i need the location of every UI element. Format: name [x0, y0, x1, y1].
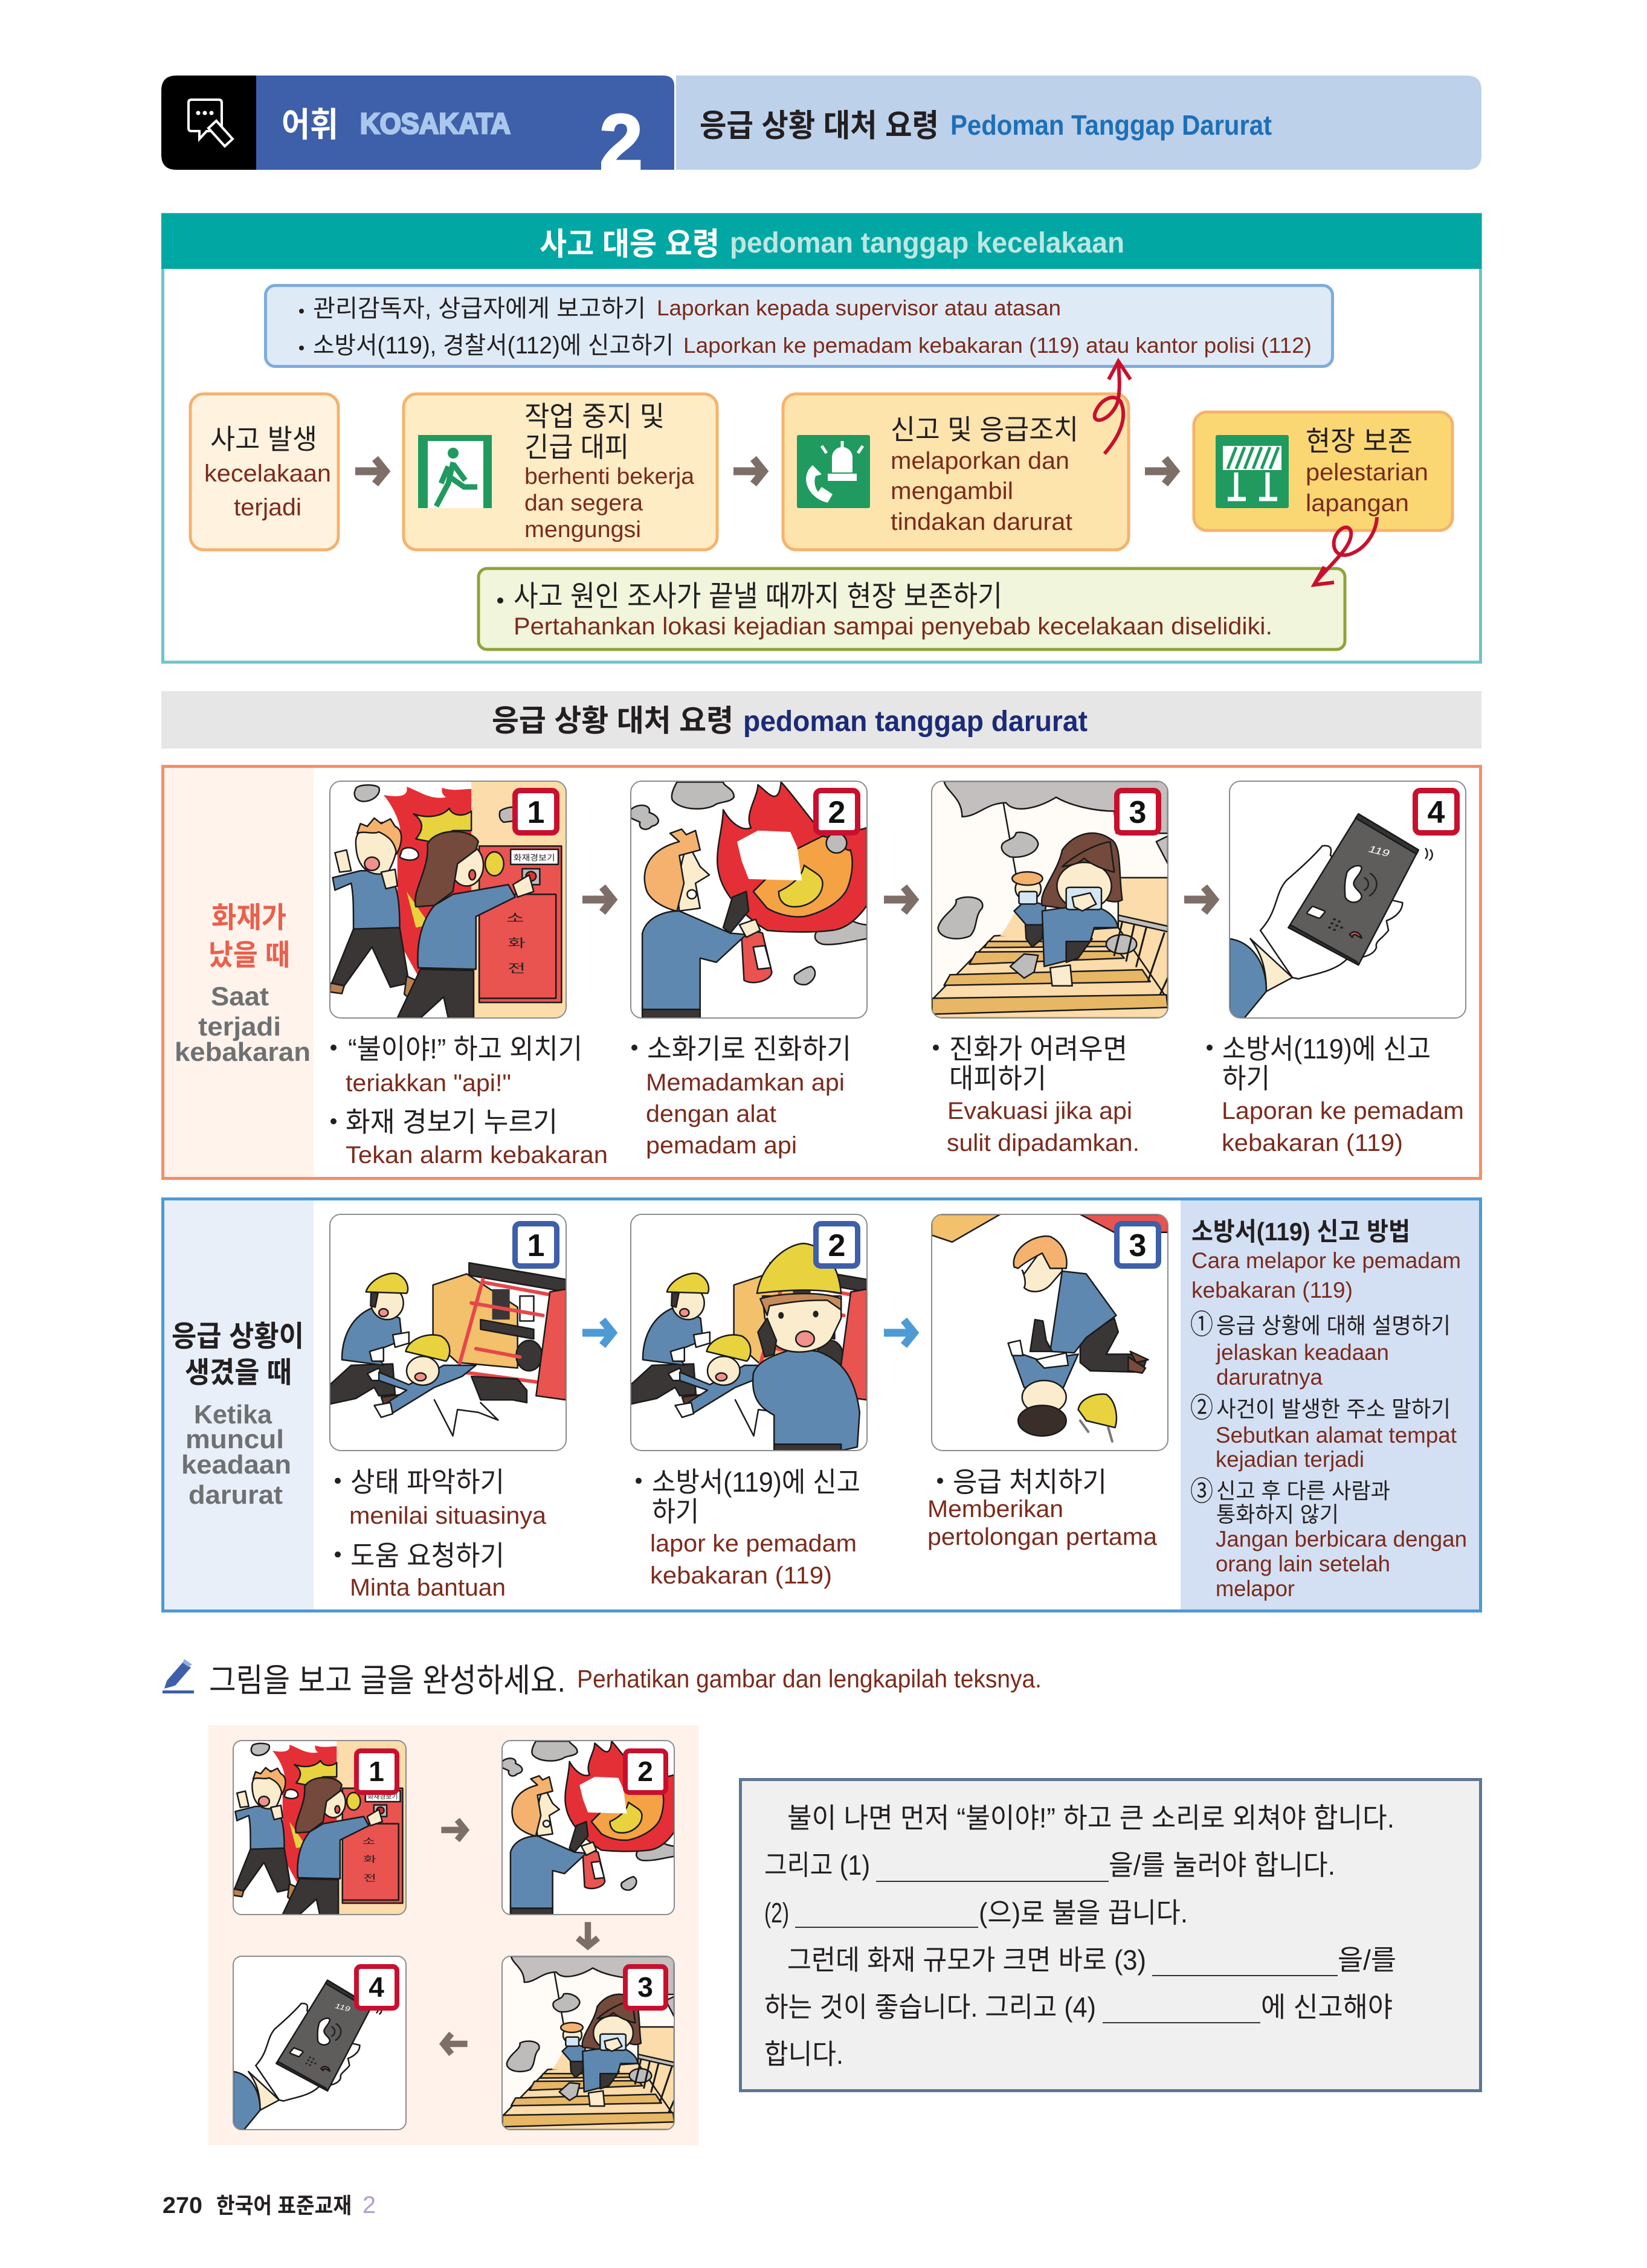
- side panel: how to report to 119: ③: [1190, 1475, 1213, 1507]
- side label: emergency: keadaan: [181, 1450, 291, 1480]
- step 4 text: 하기: [1222, 1063, 1270, 1094]
- step 3 text: 응급 처치하기: [953, 1466, 1107, 1498]
- step 2 text: Memadamkan api: [646, 1069, 845, 1096]
- exercise instruction: 그림을 보고 글을 완성하세요.: [209, 1663, 566, 1699]
- callout: report to supervisor and 119/112: [266, 285, 1333, 366]
- step 2 frame and number: [631, 781, 867, 1018]
- step 4 text: kebakaran (119): [1222, 1130, 1403, 1156]
- step 2 frame and number: [631, 1214, 867, 1451]
- side panel: how to report to 119: ②: [1190, 1392, 1213, 1423]
- step 2 illustration: call 119: [631, 1242, 866, 1450]
- flow step: accident occurs: 사고 발생: [210, 424, 317, 455]
- step 3 frame and number: [932, 1214, 1168, 1451]
- arrow: [884, 887, 914, 912]
- panel: when a fire breaks out: [163, 766, 1480, 1178]
- flow step: preserve the site: [1194, 412, 1452, 530]
- step 1 text: 상태 파악하기: [350, 1466, 504, 1498]
- arrow: [1184, 887, 1214, 912]
- step 3 illustration: evacuate by stairs: [932, 781, 1168, 1018]
- picture 4: 4: [369, 1971, 384, 2003]
- picture 3: [502, 1956, 674, 2130]
- step 1 text: Tekan alarm kebakaran: [346, 1142, 608, 1168]
- page header banner: [161, 76, 1481, 187]
- arrow: [355, 459, 385, 484]
- step 4 text: 소방서(119)에 신고: [1222, 1033, 1431, 1065]
- panel heading: [161, 213, 1481, 269]
- flow step: stop work and evacuate: 작업 중지 및: [524, 401, 665, 432]
- flow step: report and emergency measures: tindakan darurat: [891, 509, 1072, 535]
- title tab: emergency response guide: Pedoman Tanggap Darurat: [950, 109, 1272, 141]
- flow step: stop work and evacuate: [404, 394, 717, 550]
- hand-drawn red arrow down: [1314, 517, 1377, 585]
- flow step: preserve the site: 현장 보존: [1306, 425, 1413, 457]
- side label: fire: terjadi: [198, 1012, 281, 1042]
- icon: pencil: [163, 1659, 194, 1693]
- step 2 frame and number: 2: [828, 1228, 845, 1263]
- step 4 frame and number: 4: [1428, 795, 1445, 830]
- unit tab: vocabulary number 2: KOSAKATA: [360, 108, 511, 140]
- panel: fill-in-the-blank text: 그런데 화재 규모가 크면 바로 (3): [787, 1944, 1146, 1976]
- step 2 text: 소화기로 진화하기: [647, 1033, 851, 1065]
- panel: fill-in-the-blank text: 에 신고해야: [1261, 1991, 1393, 2023]
- step 4 text: [1207, 1033, 1464, 1156]
- step 3 frame and number: [932, 781, 1168, 1018]
- picture 1: 1: [369, 1756, 384, 1787]
- panel: fill-in-the-blank text: [741, 1780, 1480, 2090]
- flow step: stop work and evacuate: 긴급 대피: [524, 431, 629, 463]
- side label: fire: kebakaran: [175, 1037, 311, 1067]
- panel: when an emergency occurs: [163, 1199, 1480, 1611]
- callout: report to supervisor and 119/112: 소방서(119), 경찰서(112)에 신고하기: [313, 332, 674, 359]
- panel: fill-in-the-blank text: 을/를: [1338, 1944, 1396, 1976]
- arrow: [1145, 459, 1175, 484]
- step 3 text: 진화가 어려우면: [949, 1033, 1127, 1065]
- side label: emergency: Ketika: [194, 1400, 272, 1429]
- step 1 text: teriakkan "api!": [346, 1070, 511, 1097]
- step 4 illustration: call 119: [1230, 813, 1433, 1017]
- side panel: how to report to 119: Jangan berbicara dengan: [1216, 1527, 1467, 1551]
- unit tab: vocabulary number 2: 2: [599, 98, 643, 187]
- icon: emergency exit: [418, 435, 492, 508]
- side label: emergency: 응급 상황이: [172, 1321, 304, 1353]
- step 2 text: [636, 1466, 860, 1589]
- callout: preserve the site until investigation ends: 사고 원인 조사가 끝낼 때까지 현장 보존하기: [514, 581, 1002, 613]
- step 2 text: kebakaran (119): [650, 1562, 832, 1589]
- picture 3: 3: [637, 1971, 653, 2003]
- unit tab: vocabulary number 2: [256, 76, 674, 187]
- step 2 text: dengan alat: [646, 1101, 776, 1127]
- icon: chat bubble with pencil: [161, 76, 257, 170]
- arrow: [582, 1320, 613, 1345]
- step 3 text: [927, 1466, 1158, 1550]
- step 4 frame and number: [1230, 781, 1466, 1018]
- step 1 frame and number: 1: [527, 1228, 544, 1263]
- side panel: how to report to 119: kejadian terjadi: [1216, 1447, 1364, 1472]
- arrow: [884, 1320, 914, 1345]
- callout: preserve the site until investigation ends: [479, 569, 1345, 649]
- step 2 frame and number: 2: [828, 795, 845, 830]
- side label: fire: Saat: [211, 982, 269, 1011]
- side label: emergency: [164, 1200, 314, 1609]
- section heading: emergency response guide: [161, 691, 1481, 749]
- side panel: how to report to 119: orang lain setelah: [1216, 1551, 1390, 1576]
- picture 2: 2: [637, 1756, 653, 1787]
- step 2 text: [631, 1033, 851, 1159]
- side label: emergency: darurat: [189, 1480, 283, 1510]
- step 3 text: sulit dipadamkan.: [947, 1130, 1139, 1156]
- panel heading: pedoman tanggap kecelakaan: [730, 227, 1124, 259]
- step 1 illustration: shout and press alarm: [330, 781, 566, 1018]
- side label: fire: 화재가: [211, 902, 286, 934]
- exercise instruction: [163, 1659, 1042, 1699]
- flow step: report and emergency measures: [783, 394, 1129, 550]
- step 1 text: “불이야!” 하고 외치기: [348, 1033, 582, 1065]
- side panel: how to report to 119: Cara melapor ke pemadam: [1191, 1248, 1461, 1273]
- flow step: report and emergency measures: 신고 및 응급조치: [891, 414, 1078, 445]
- side panel: how to report to 119: jelaskan keadaan: [1216, 1340, 1389, 1365]
- step 3 text: Evakuasi jika api: [947, 1098, 1132, 1124]
- step 3 text: [933, 1033, 1139, 1156]
- side panel: how to report to 119: kebakaran (119): [1191, 1278, 1353, 1303]
- step 1 text: [330, 1033, 608, 1168]
- side panel: how to report to 119: 신고 후 다른 사람과: [1216, 1478, 1390, 1503]
- flow step: accident occurs: kecelakaan: [204, 460, 331, 487]
- step 1 illustration: assess the situation: [330, 1262, 566, 1437]
- icon: siren and phone: [797, 435, 870, 508]
- panel: fill-in-the-blank text: 합니다.: [764, 2038, 843, 2070]
- icon: barrier: [1216, 435, 1289, 508]
- flow step: stop work and evacuate: dan segera: [524, 491, 643, 516]
- exercise instruction: Perhatikan gambar dan lengkapilah teksnya.: [577, 1664, 1042, 1693]
- side panel: how to report to 119: Sebutkan alamat tempat: [1216, 1423, 1457, 1448]
- arrow down: [578, 1922, 598, 1946]
- side label: emergency: muncul: [185, 1425, 284, 1454]
- side label: emergency: 생겼을 때: [185, 1357, 292, 1389]
- flow step: accident occurs: terjadi: [234, 494, 301, 521]
- section heading: emergency response guide: 응급 상황 대처 요령: [492, 704, 733, 738]
- step 2 illustration: use extinguisher: [631, 781, 867, 1018]
- side panel: how to report to 119: 사건이 발생한 주소 말하기: [1216, 1397, 1451, 1422]
- flow step: preserve the site: lapangan: [1306, 490, 1409, 517]
- footer: page number and book title: [163, 2192, 376, 2218]
- panel: fill-in-the-blank text: 그리고 (1): [764, 1849, 870, 1881]
- arrow: [582, 887, 613, 912]
- panel: fill-in-the-blank text: 불이 나면 먼저 “불이야!” 하고 큰 소리로 외쳐야 합니다.: [787, 1802, 1394, 1834]
- panel: fill-in-the-blank text: 을/를 눌러야 합니다.: [1109, 1849, 1335, 1881]
- step 4 text: Laporan ke pemadam: [1222, 1098, 1464, 1124]
- panel heading: 사고 대응 요령: [540, 227, 720, 262]
- arrow right: [441, 1820, 465, 1840]
- panel: fill-in-the-blank text: (2): [764, 1897, 789, 1928]
- footer: page number and book title: 한국어 표준교재: [216, 2193, 352, 2218]
- step 2 text: pemadam api: [646, 1132, 797, 1159]
- step 1 text: [335, 1466, 547, 1601]
- picture 2: [502, 1741, 674, 1915]
- step 1 text: menilai situasinya: [349, 1503, 547, 1529]
- step 2 text: 소방서(119)에 신고: [652, 1466, 860, 1498]
- flow step: preserve the site: pelestarian: [1306, 459, 1428, 486]
- panel: exercise picture sequence: [208, 1725, 698, 2145]
- title tab: emergency response guide: [676, 76, 1481, 170]
- step 2 text: lapor ke pemadam: [650, 1530, 857, 1557]
- step 3 text: Memberikan: [927, 1496, 1063, 1522]
- step 3 text: 대피하기: [949, 1063, 1046, 1094]
- step 1 text: 도움 요청하기: [350, 1540, 504, 1571]
- callout: report to supervisor and 119/112: Laporkan kepada supervisor atau atasan: [657, 295, 1061, 320]
- step 3 frame and number: 3: [1129, 1228, 1146, 1263]
- arrow: [733, 459, 764, 484]
- side panel: how to report to 119: 응급 상황에 대해 설명하기: [1216, 1313, 1451, 1338]
- unit tab: vocabulary number 2: 어휘: [282, 106, 338, 144]
- panel: fill-in-the-blank text: 하는 것이 좋습니다. 그리고 (4): [764, 1991, 1096, 2023]
- panel: fill-in-the-blank text: (으)로 불을 끕니다.: [979, 1897, 1188, 1928]
- side panel: how to report to 119: [1181, 1200, 1479, 1609]
- step 3 frame and number: 3: [1129, 795, 1146, 830]
- step 1 text: Minta bantuan: [350, 1574, 506, 1601]
- side panel: how to report to 119: ①: [1190, 1309, 1213, 1340]
- panel: accident response guide: [161, 213, 1481, 662]
- step 1 text: 화재 경보기 누르기: [346, 1106, 558, 1138]
- side panel: how to report to 119: daruratnya: [1216, 1365, 1323, 1390]
- step 1 frame and number: [330, 1214, 566, 1451]
- side label: fire: 났을 때: [208, 939, 290, 971]
- section heading: emergency response guide: pedoman tanggap darurat: [743, 706, 1088, 738]
- callout: report to supervisor and 119/112: 관리감독자, 상급자에게 보고하기: [313, 295, 646, 322]
- step 1 frame and number: 1: [527, 795, 544, 830]
- callout: preserve the site until investigation ends: Pertahankan lokasi kejadian sampai penyebab kecelakaan diselidiki.: [514, 613, 1272, 640]
- side panel: how to report to 119: 소방서(119) 신고 방법: [1191, 1217, 1410, 1246]
- step 3 text: pertolongan pertama: [927, 1524, 1158, 1550]
- side panel: how to report to 119: melapor: [1216, 1576, 1295, 1601]
- side panel: how to report to 119: 통화하지 않기: [1216, 1502, 1339, 1527]
- side label: fire: [164, 768, 314, 1177]
- step 1 frame and number: [330, 781, 566, 1018]
- footer: page number and book title: 2: [363, 2192, 376, 2218]
- step 2 text: 하기: [652, 1496, 699, 1527]
- hand-drawn red arrow up: [1095, 361, 1130, 454]
- flow step: report and emergency measures: mengambil: [891, 478, 1013, 504]
- flow step: stop work and evacuate: berhenti bekerja: [524, 464, 695, 489]
- callout: report to supervisor and 119/112: Laporkan ke pemadam kebakaran (119) atau kantor polisi (112): [683, 333, 1312, 358]
- title tab: emergency response guide: 응급 상황 대처 요령: [700, 109, 939, 144]
- picture 1: [233, 1741, 406, 1915]
- step 3 illustration: first aid: [932, 1214, 1168, 1451]
- picture 4: [233, 1956, 406, 2130]
- flow step: report and emergency measures: melaporkan dan: [891, 448, 1069, 474]
- arrow left: [443, 2034, 468, 2054]
- flow step: stop work and evacuate: mengungsi: [524, 517, 641, 543]
- flow step: accident occurs: [190, 394, 338, 550]
- footer: page number and book title: 270: [163, 2193, 202, 2218]
